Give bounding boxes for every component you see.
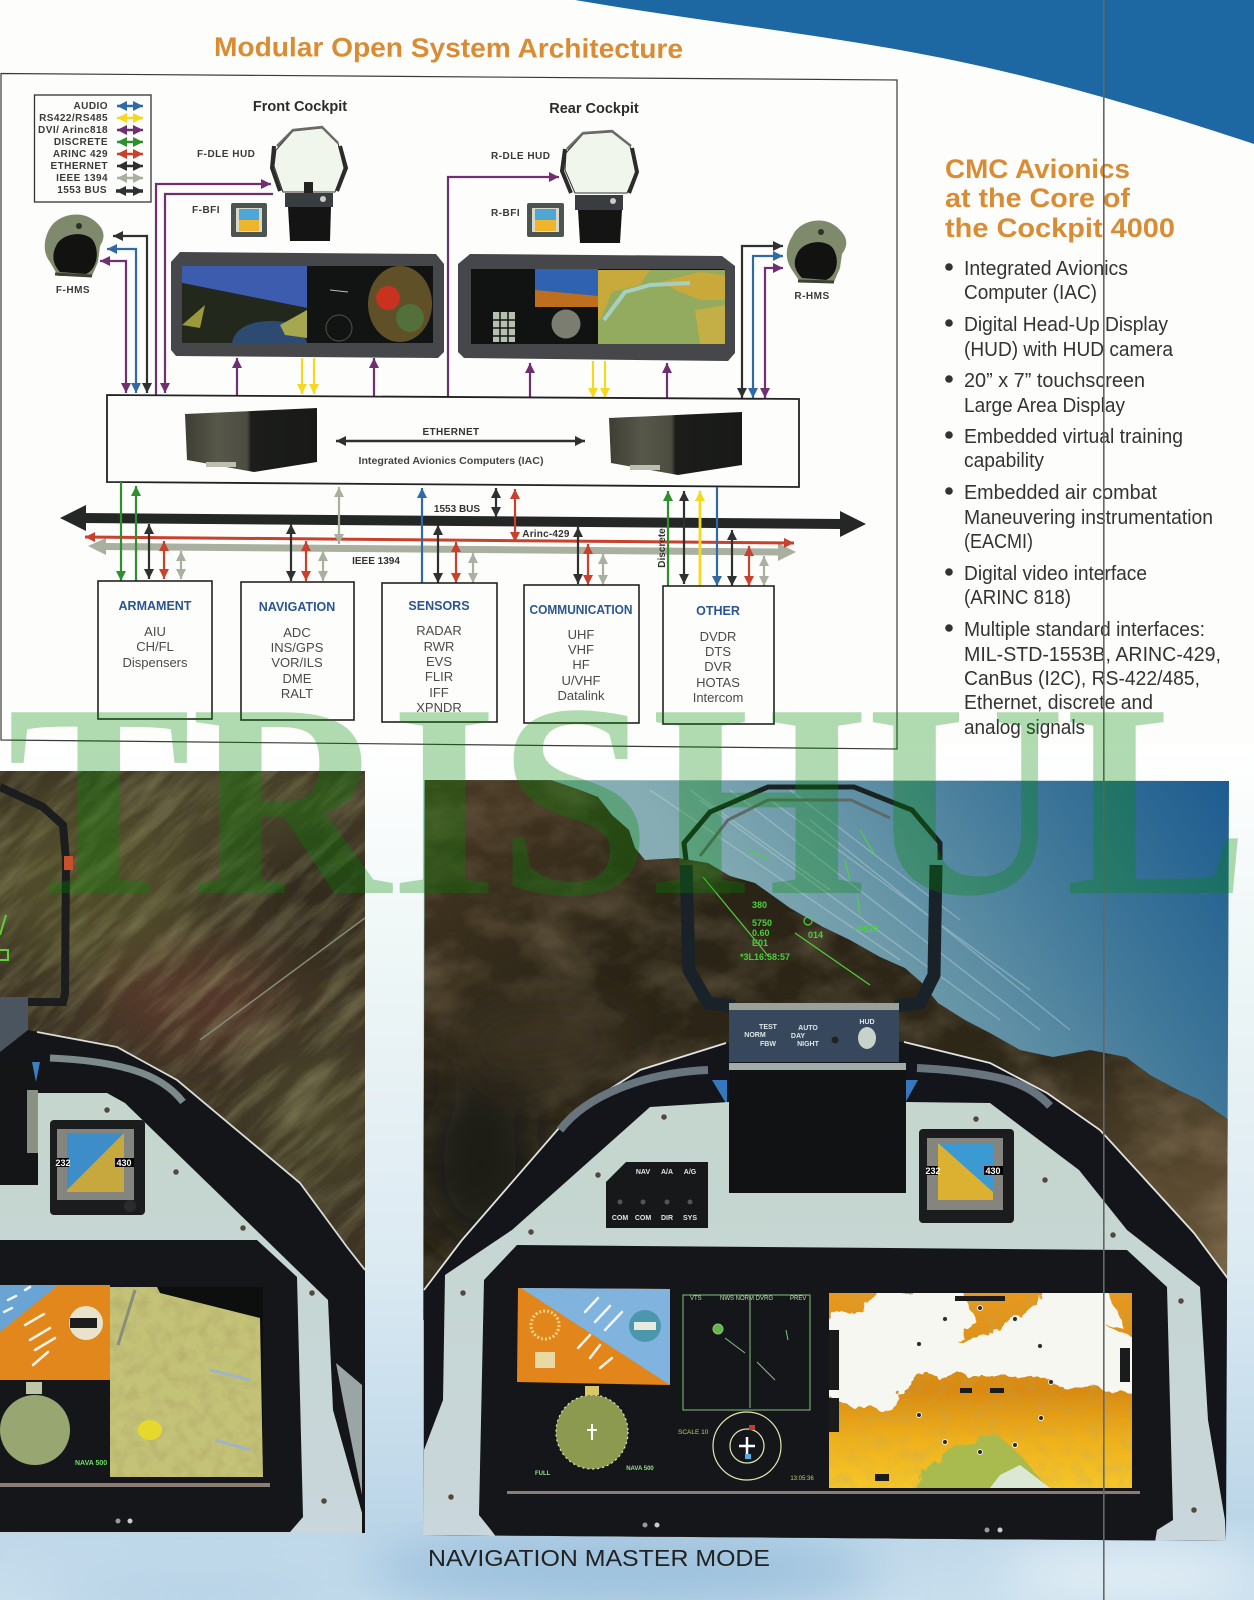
canopy rim line [37, 1032, 365, 1270]
arrows: rear cockpit connections [448, 177, 783, 399]
label: 1553 BUS: 1553 BUS [434, 504, 480, 515]
feature bullet list: Computer (IAC) [964, 282, 1097, 304]
side heading: CMC Avionics [945, 154, 1130, 184]
switch panel: COM [612, 1215, 628, 1222]
panel: other: HOTAS [696, 675, 740, 690]
panel: communication: VHF [568, 642, 594, 657]
canopy rim line [424, 1042, 1229, 1290]
panel: navigation: VOR/ILS [271, 655, 323, 670]
feature bullet list: Embedded air combat [964, 482, 1157, 504]
panel: navigation: RALT [281, 686, 313, 701]
panel: sensors: FLIR [425, 669, 453, 684]
rear large area display [458, 254, 735, 361]
legend: RS422/RS485 [39, 113, 108, 124]
feature bullet list: Ethernet, discrete and [964, 692, 1153, 714]
screws [448, 1114, 1198, 1514]
photo: left cockpit view [0, 771, 365, 1533]
HUD readouts: *3L16:58:57 [740, 952, 790, 962]
HUD control box [0, 997, 28, 1052]
flight plan window [683, 1295, 810, 1410]
side heading: the Cockpit 4000 [945, 213, 1175, 243]
label: R-BFI: R-BFI [491, 208, 520, 219]
flight plan window: VTS [690, 1296, 702, 1302]
canopy band [0, 1030, 365, 1533]
instrument panel [423, 1102, 1226, 1541]
front large area display [171, 252, 444, 358]
HUD control unit: NORM [744, 1032, 766, 1039]
panel: armament: ARMAMENT [119, 599, 192, 613]
HUD control unit: AUTO [798, 1025, 818, 1032]
legend [34, 95, 151, 202]
HUD readouts: 380 [752, 900, 767, 910]
terrain [0, 771, 365, 1268]
terrain map [815, 1288, 1145, 1495]
panel: navigation [241, 582, 354, 720]
label: integrated avionics computers: Integrated Avionics Computers (IAC) [358, 455, 544, 467]
black HUD body [729, 1070, 906, 1193]
HUD readouts: 0.60 [752, 928, 770, 938]
HUD frame [684, 787, 940, 1006]
HUD readouts: 014 [808, 930, 823, 940]
compass rose [535, 1386, 654, 1477]
standby instrument right: 232 [925, 1166, 941, 1176]
standby instrument left: 430 [116, 1158, 132, 1168]
label: Discrete: Discrete [657, 528, 668, 568]
icon: front BFI [231, 203, 267, 237]
switch panel: SYS [683, 1215, 697, 1222]
legend: DISCRETE [54, 137, 108, 148]
title: Modular Open System Architecture [214, 32, 683, 64]
feature bullet list: (ARINC 818) [964, 587, 1071, 609]
bus: IEEE 1394 [104, 546, 779, 552]
screws [104, 1106, 328, 1504]
feature bullet list: (HUD) with HUD camera [964, 339, 1174, 361]
icon: rear BFI [527, 203, 564, 237]
feature bullet list: Embedded virtual training [964, 426, 1183, 448]
panel: sensors: EVS [426, 654, 452, 669]
caption: NAVIGATION MASTER MODE [428, 1545, 770, 1571]
switch panel [606, 1162, 708, 1228]
panel: other: DVDR [700, 629, 736, 644]
panel: communication: U/VHF [562, 673, 601, 688]
panel: communication: UHF [568, 627, 594, 642]
panel: armament: Dispensers [122, 655, 188, 670]
standby instrument left: 232 [55, 1158, 71, 1168]
panel: architecture diagram [1, 74, 897, 749]
panel: communication: HF [572, 657, 590, 672]
bus: 1553 [80, 518, 842, 524]
panel: armament [98, 581, 212, 719]
HUD control unit: TEST [759, 1024, 778, 1031]
panel: sensors: SENSORS [408, 599, 470, 613]
HUD control unit [729, 1003, 906, 1070]
sky streaks [650, 790, 1070, 1030]
panel: integrated avionics computers [107, 395, 799, 487]
flight plan window: PREV [790, 1296, 806, 1302]
legend: ARINC 429 [53, 149, 108, 160]
bus arrowheads: IEEE 1394 [88, 538, 796, 561]
HUD control unit: NIGHT [797, 1041, 820, 1048]
legend: 1553 BUS [57, 185, 107, 196]
feature bullet list: CanBus (I2C), RS-422/485, [964, 668, 1200, 690]
panel: other: DTS [705, 644, 731, 659]
panel: sensors: XPNDR [416, 700, 462, 715]
switch panel: COM [635, 1215, 651, 1222]
radar scope: SCALE 10 [678, 1429, 709, 1436]
panel: other [663, 586, 774, 724]
feature bullet list: Large Area Display [964, 395, 1125, 417]
side heading [945, 154, 1175, 243]
legend: ETHERNET [50, 161, 108, 172]
panel: sensors: RWR [424, 639, 454, 654]
radar scope: 13:05:36 [790, 1476, 814, 1482]
HUD readouts: E01 [752, 938, 768, 948]
panel: armament: CH/FL [136, 639, 174, 654]
label: R-DLE HUD: R-DLE HUD [491, 151, 550, 162]
feature bullet list: capability [964, 450, 1044, 472]
feature bullet list: 20” x 7” touchscreen [964, 370, 1145, 392]
feature bullet list: Maneuvering instrumentation [964, 507, 1213, 529]
label: ethernet: ETHERNET [422, 427, 480, 438]
fold line [1103, 0, 1105, 1600]
panel: other: Intercom [693, 690, 743, 705]
icon: rear helmet [787, 221, 846, 282]
standby instrument right [919, 1129, 1014, 1223]
label: F-DLE HUD: F-DLE HUD [197, 149, 255, 160]
switch panel: NAV [636, 1169, 650, 1176]
side heading: at the Core of [945, 183, 1131, 213]
HUD readouts: 5750 [752, 918, 772, 928]
legend: AUDIO [74, 101, 108, 112]
red indicator [64, 856, 73, 870]
arrows: bus drops [121, 482, 764, 586]
large area display left: NAVA 500 [75, 1460, 107, 1467]
label: IEEE 1394: IEEE 1394 [352, 556, 400, 567]
HUD readouts: +0520 [853, 924, 878, 934]
feature bullet list [945, 258, 1221, 739]
label: F-BFI: F-BFI [192, 205, 220, 216]
feature bullet list: Multiple standard interfaces: [964, 619, 1205, 641]
heading: rear cockpit: Rear Cockpit [549, 101, 639, 117]
arrows: front helmet connections [100, 236, 147, 393]
panel: navigation: NAVIGATION [259, 600, 335, 614]
legend: DVI/ Arinc818 [38, 125, 108, 136]
feature bullet list: MIL-STD-1553B, ARINC-429, [964, 644, 1221, 666]
feature bullet list: analog signals [964, 717, 1085, 739]
icon: front HUD [272, 127, 346, 241]
icon: right IAC computer [609, 412, 742, 475]
icon: front helmet [45, 214, 104, 276]
panel: navigation: INS/GPS [271, 640, 324, 655]
legend: IEEE 1394 [56, 173, 108, 184]
compass rose: NAVA 500 [626, 1466, 654, 1472]
flight plan window: NWS NORM DVRG [720, 1296, 773, 1302]
panel: sensors: IFF [429, 685, 449, 700]
bus: Arinc-429 [85, 537, 794, 543]
standby instrument left [50, 1120, 145, 1215]
panel: navigation: DME [283, 671, 312, 686]
panel: sensors: RADAR [416, 623, 462, 638]
HUD control unit: HUD [859, 1019, 875, 1026]
panel: other: OTHER [696, 604, 740, 618]
panel: communication [524, 585, 639, 723]
heading: front cockpit: Front Cockpit [253, 99, 347, 115]
bus arrowheads: 1553 [60, 505, 866, 537]
arrow: ethernet link [336, 440, 585, 442]
label: R-HMS: R-HMS [794, 291, 830, 302]
HUD frame edge [0, 787, 66, 1002]
blue brackets [712, 1080, 918, 1105]
terrain [420, 777, 1229, 1322]
feature bullet list: (EACMI) [964, 531, 1033, 553]
panel: armament: AIU [144, 624, 166, 639]
sky [423, 780, 1229, 1550]
label: Arinc-429: Arinc-429 [522, 529, 570, 540]
large area display right [479, 1245, 1173, 1542]
canopy tubes [560, 1068, 1050, 1130]
panel: communication: COMMUNICATION [530, 603, 632, 617]
icon: left IAC computer [185, 408, 317, 472]
switch panel: A/G [684, 1169, 697, 1176]
HUD control unit: DAY [791, 1033, 805, 1040]
HUD readouts [740, 900, 878, 962]
panel: communication: Datalink [558, 688, 605, 703]
radar scope [678, 1412, 814, 1482]
panel: sensors [382, 583, 497, 722]
photo: right cockpit view [420, 777, 1229, 1550]
panel: navigation: ADC [283, 625, 311, 640]
switch panel: A/A [661, 1169, 673, 1176]
feature bullet list: Digital video interface [964, 563, 1147, 585]
attitude indicator [517, 1288, 670, 1385]
HUD symbols [0, 915, 8, 960]
compass rose: FULL [535, 1471, 551, 1477]
canopy band [424, 1042, 1229, 1541]
feature bullet list: Digital Head-Up Display [964, 314, 1168, 336]
icon: rear HUD [562, 131, 637, 243]
canopy tube [50, 1058, 183, 1102]
blue corner curve [575, 0, 1254, 144]
watermark: TRISHUL [7, 647, 1249, 953]
HUD control unit: FBW [760, 1041, 776, 1048]
large area display left [0, 1240, 303, 1532]
arrows: front cockpit connections [156, 184, 374, 396]
label: F-HMS: F-HMS [56, 285, 90, 296]
panel: other: DVR [704, 659, 732, 674]
display bezel strip [507, 1491, 1140, 1494]
switch panel: DIR [661, 1215, 673, 1222]
HUD symbology [703, 830, 875, 985]
standby instrument right: 430 [985, 1166, 1001, 1176]
feature bullet list: Integrated Avionics [964, 258, 1128, 280]
panel left [0, 1060, 362, 1533]
